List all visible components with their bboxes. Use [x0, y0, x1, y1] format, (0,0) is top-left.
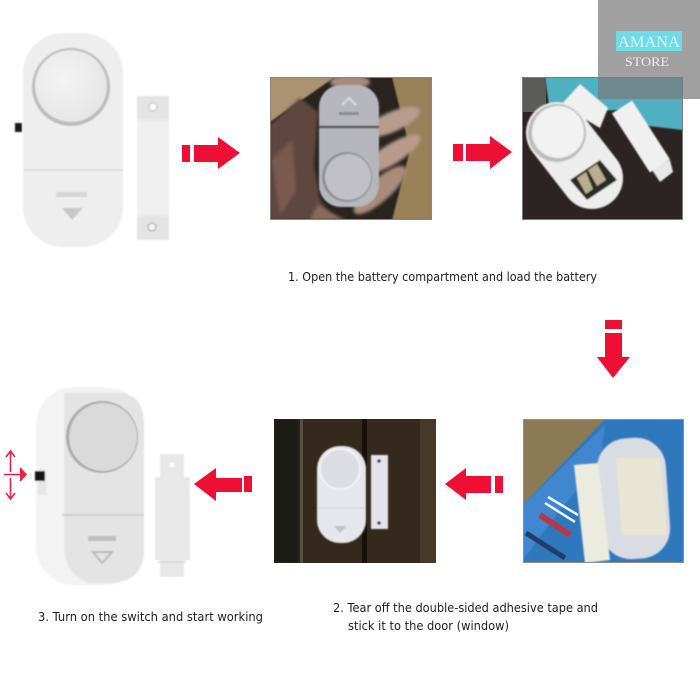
text: step 2: 2. Tear off the double-sided adhesive tape and	[333, 601, 598, 615]
watermark: Amana Store: AMANA	[618, 34, 680, 51]
text: step 2: stick it to the door (window)	[348, 619, 509, 633]
product: alarm and magnet, top left	[15, 33, 169, 247]
watermark: Amana Store: STORE	[625, 55, 669, 69]
text: step 2	[333, 601, 598, 633]
arrow: left, photo 4 to product	[194, 468, 252, 501]
photo: alarm mounted on door	[274, 419, 436, 563]
photo: hand holding the alarm	[270, 75, 432, 221]
watermark: Amana Store	[598, 0, 700, 99]
photo: adhesive tape on the back	[523, 419, 684, 563]
product: alarm and magnet with switch, bottom left	[35, 387, 190, 585]
arrow: left, photo 3 to photo 4	[445, 468, 503, 500]
arrow: right, step 1 to photo 1	[182, 137, 240, 169]
arrow: right, photo 1 to photo 2	[453, 136, 512, 169]
arrow: down	[597, 320, 630, 378]
photo: open battery compartment	[522, 77, 683, 220]
icon: red switch direction arrows	[4, 451, 26, 499]
text: step 3: 3. Turn on the switch and start working	[38, 610, 263, 624]
text: step 1: 1. Open the battery compartment and load the battery	[288, 270, 597, 284]
